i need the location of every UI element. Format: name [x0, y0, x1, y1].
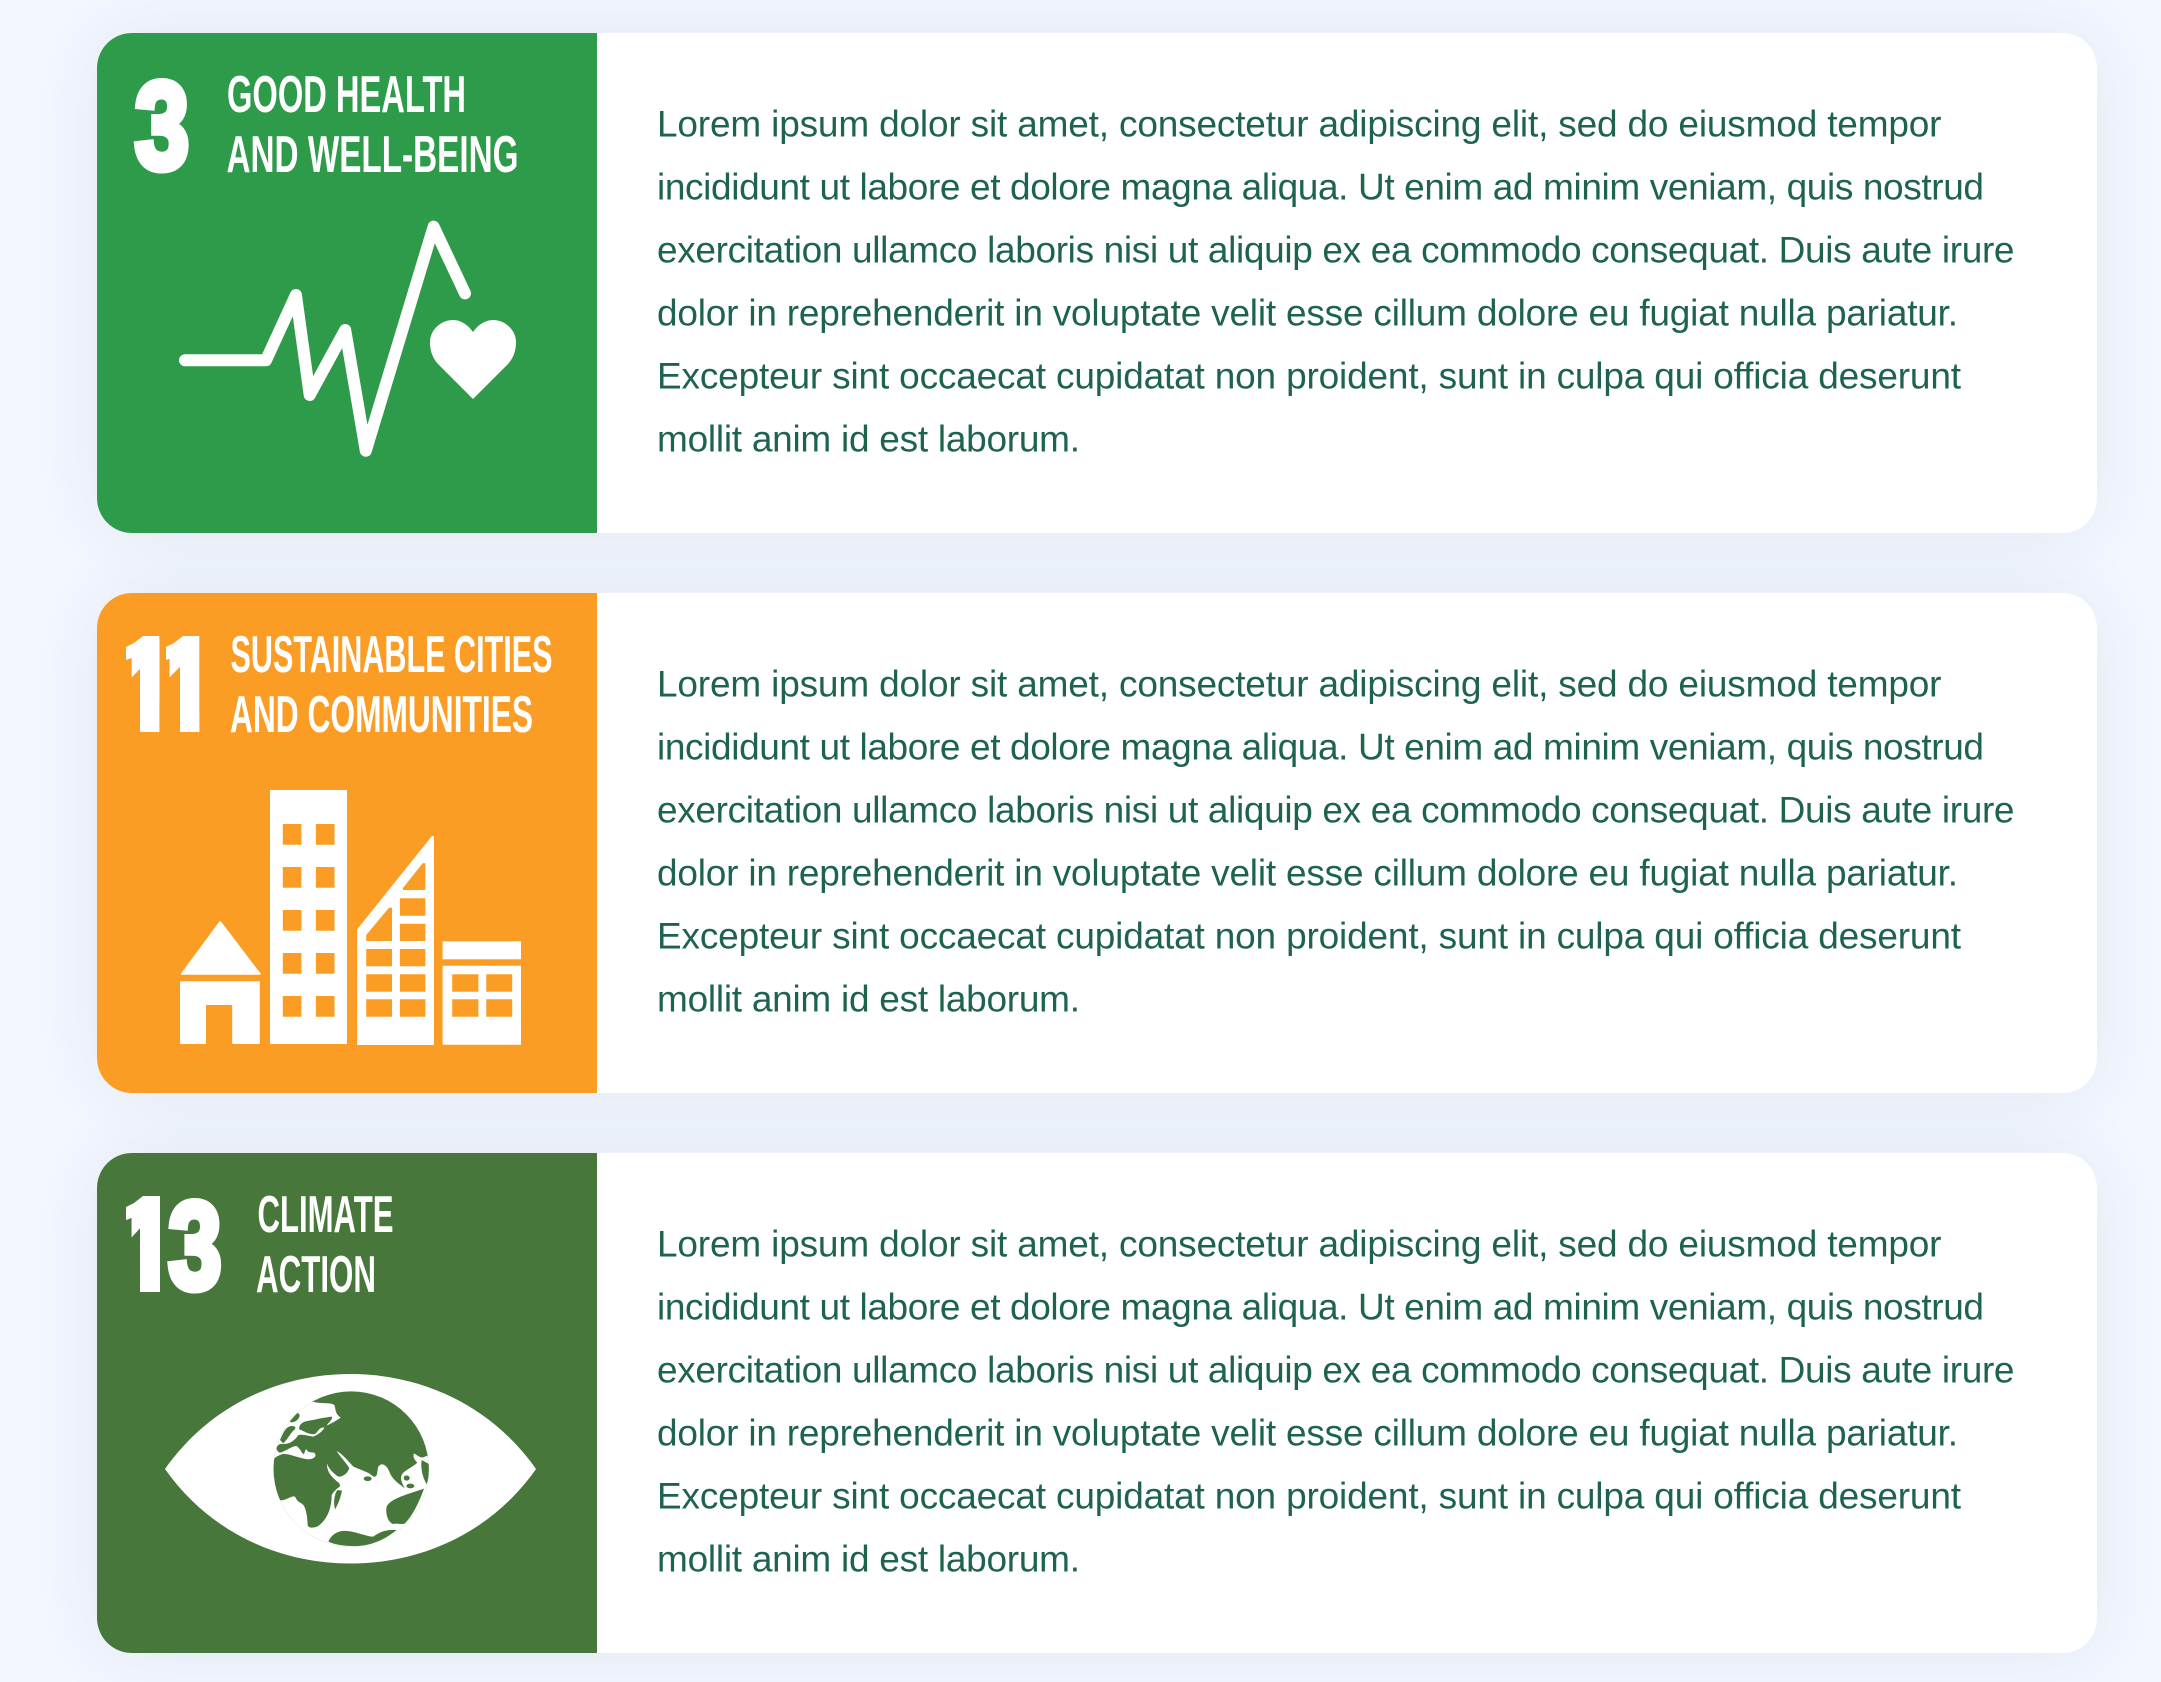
- heading: climate action: [256, 1186, 394, 1304]
- text block: goal 3 description: mollit anim id est laborum.: [657, 418, 1080, 460]
- panel: goal 13 dark green tile: [97, 1153, 597, 1653]
- goal number 13: 1: [129, 1178, 169, 1315]
- text block: goal 13 description: Excepteur sint occaecat cupidatat non proident, sunt in culpa qui officia deserunt: [657, 1476, 1962, 1516]
- text block: goal 11 description: incididunt ut labore et dolore magna aliqua. Ut enim ad minim veniam, quis nostrud: [657, 726, 1984, 768]
- goal number 11: [112, 618, 214, 755]
- text block: goal 11 description: dolor in reprehenderit in voluptate velit esse cillum dolore eu fugiat nulla pariatur.: [657, 852, 1958, 894]
- heading: good health and well-being: GOOD HEALTH: [227, 66, 466, 124]
- text block: goal 11 description: Excepteur sint occaecat cupidatat non proident, sunt in culpa qui officia deserunt: [657, 916, 1962, 956]
- panel: goal 11 orange tile: [97, 593, 597, 1093]
- slanted building: [357, 836, 434, 1045]
- text block: goal 13 description: dolor in reprehenderit in voluptate velit esse cillum dolore eu fugiat nulla pariatur.: [657, 1412, 1958, 1454]
- text block: goal 11 description: Lorem ipsum dolor sit amet, consectetur adipiscing elit, sed do eiusmod tempor: [657, 664, 1942, 704]
- text block: goal 13 description: [657, 1224, 2014, 1580]
- panel: goal 3 green tile: [97, 33, 597, 533]
- goal number 11: 11: [129, 618, 209, 755]
- text block: goal 3 description: Excepteur sint occaecat cupidatat non proident, sunt in culpa qui officia deserunt: [657, 356, 1962, 396]
- icon: heartbeat and heart: [185, 227, 516, 451]
- text block: goal 11 description: [657, 664, 2014, 1020]
- text block: goal 13 description: incididunt ut labore et dolore magna aliqua. Ut enim ad minim veniam, quis nostrud: [657, 1286, 1984, 1328]
- goal number 3: 3: [135, 58, 189, 195]
- globe: [274, 1391, 429, 1547]
- icon: eye with globe: [165, 1374, 536, 1564]
- card: goal 3: [97, 33, 2097, 533]
- heading: climate action: CLIMATE: [258, 1186, 394, 1244]
- text block: goal 3 description: [657, 104, 2014, 460]
- text block: goal 3 description: exercitation ullamco laboris nisi ut aliquip ex ea commodo consequat. Duis aute irure: [657, 230, 2014, 270]
- low building: [443, 941, 521, 1045]
- text block: goal 3 description: Lorem ipsum dolor sit amet, consectetur adipiscing elit, sed do eiusmod tempor: [657, 104, 1942, 144]
- tower: [270, 790, 347, 1044]
- heading: climate action: ACTION: [256, 1246, 376, 1304]
- goal number 13: 3: [168, 1178, 222, 1315]
- icon: city buildings: [180, 790, 521, 1045]
- heading: sustainable cities and communities: [230, 626, 552, 744]
- text block: goal 3 description: incididunt ut labore et dolore magna aliqua. Ut enim ad minim veniam, quis nostrud: [657, 166, 1984, 208]
- text block: goal 13 description: exercitation ullamco laboris nisi ut aliquip ex ea commodo consequat. Duis aute irure: [657, 1350, 2014, 1390]
- text block: goal 11 description: exercitation ullamco laboris nisi ut aliquip ex ea commodo consequat. Duis aute irure: [657, 790, 2014, 830]
- heading: good health and well-being: [226, 66, 518, 184]
- text block: goal 3 description: dolor in reprehenderit in voluptate velit esse cillum dolore eu fugiat nulla pariatur.: [657, 292, 1958, 334]
- text block: goal 13 description: Lorem ipsum dolor sit amet, consectetur adipiscing elit, sed do eiusmod tempor: [657, 1224, 1942, 1264]
- text block: goal 11 description: mollit anim id est laborum.: [657, 978, 1080, 1020]
- text block: goal 13 description: mollit anim id est laborum.: [657, 1538, 1080, 1580]
- goal number 13: [112, 1178, 222, 1315]
- card: goal 13: [97, 1153, 2097, 1653]
- house: [180, 922, 260, 1044]
- card: goal 11: [97, 593, 2097, 1093]
